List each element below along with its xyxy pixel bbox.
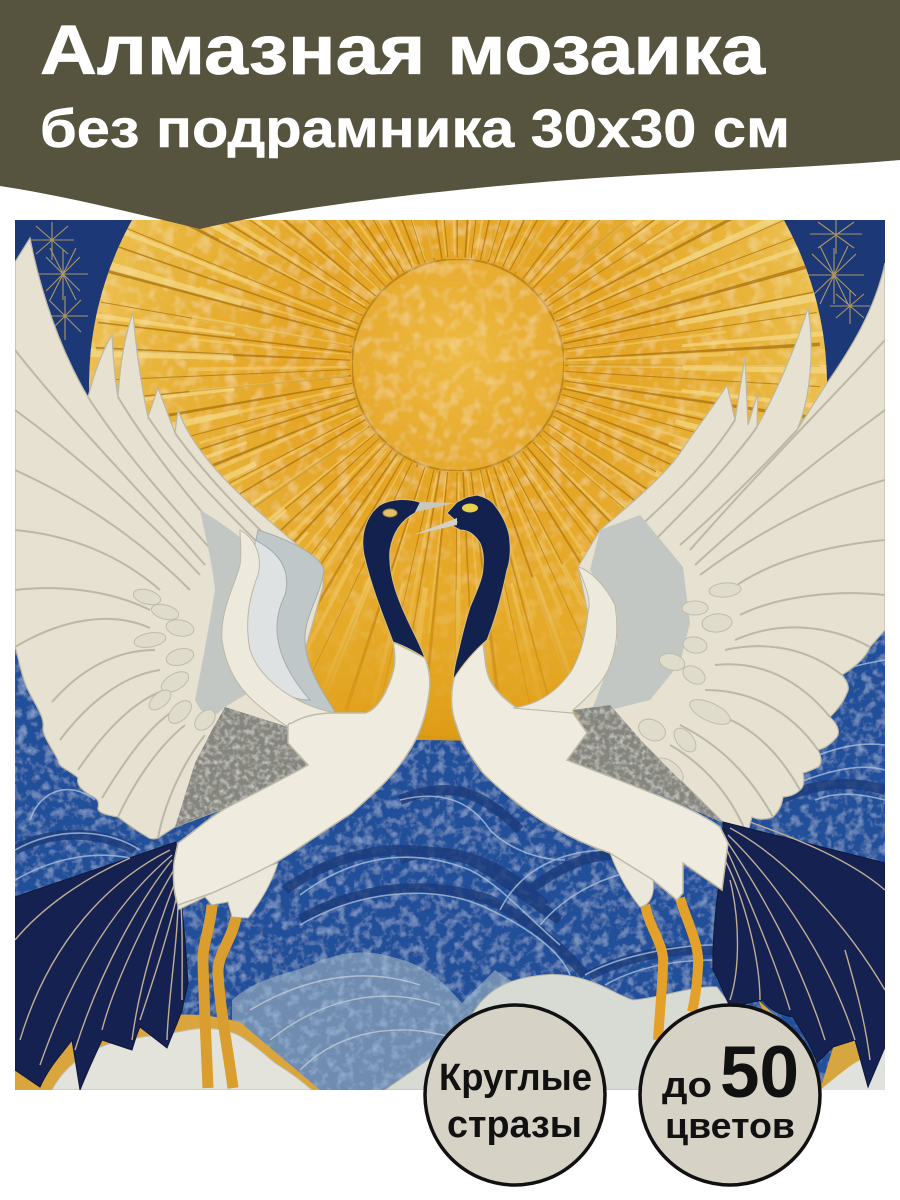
left eye: [383, 509, 397, 517]
grey-blue hills: [232, 952, 540, 1090]
right legs: [645, 898, 698, 1040]
white cloud right: [384, 974, 728, 1090]
left wing: [15, 238, 323, 839]
illustration: two cranes and golden sun: [15, 220, 885, 1090]
left legs: [203, 905, 236, 1088]
badge: up to 50 colours: [640, 1005, 820, 1185]
right grey patch: [567, 705, 723, 823]
wave contour lines: [15, 660, 885, 985]
sun rays stitching: [158, 65, 758, 665]
hill contour lines: [250, 976, 460, 1070]
right inner white wing band: [513, 567, 617, 713]
night sky: [15, 220, 885, 780]
subtitle: без подрамника 30х30 см: [40, 99, 790, 159]
badge: round rhinestones: стразы: [447, 1104, 582, 1146]
right covert feathers: [635, 582, 742, 786]
badge: up to 50 colours: цветов: [665, 1105, 795, 1146]
header banner: [0, 0, 900, 229]
starbursts in sky: [30, 220, 870, 340]
left inner white wing band: [222, 530, 335, 727]
right crane: [413, 263, 885, 1087]
badge: round rhinestones: [425, 1005, 605, 1185]
left pale blue band: [247, 540, 310, 700]
left crane: [15, 238, 455, 1090]
wave contour bands: [15, 784, 885, 975]
right beak: [413, 518, 457, 535]
right wing silver coverts: [590, 515, 690, 715]
lower-right gold and cloud: [758, 1001, 860, 1089]
left covert feathers: [132, 587, 219, 734]
right thigh: [610, 853, 653, 907]
left thigh: [178, 863, 278, 918]
lower-right white cloud: [820, 1045, 885, 1090]
right neck dark: [447, 495, 510, 680]
right tail gold lines: [725, 822, 885, 1060]
left neck dark: [363, 499, 425, 658]
badge: round rhinestones: Круглые: [439, 1057, 592, 1099]
title: Алмазная мозаика: [40, 11, 766, 89]
right wing feather lines: [630, 340, 885, 830]
left beak: [415, 502, 455, 512]
badge: up to 50 colours: 50: [720, 1032, 799, 1113]
sea waves: [15, 620, 885, 1090]
left grey patch: [175, 707, 308, 827]
right eye: [462, 504, 478, 512]
badge: up to 50 colours: до: [662, 1064, 712, 1105]
lower gold shading: [290, 526, 592, 741]
left wing silver coverts: [195, 510, 246, 714]
left body and neck: [173, 642, 430, 905]
left silver bands: [256, 529, 336, 712]
central sun: [352, 259, 564, 471]
white cloud left: [52, 1028, 312, 1090]
lower-left gold band: [15, 1014, 320, 1090]
golden disc: [89, 220, 827, 736]
right tail: [713, 822, 885, 1087]
left wing feather lines: [15, 350, 275, 838]
left tail: [15, 842, 188, 1090]
right wing: [573, 263, 885, 835]
right body and neck: [452, 643, 728, 900]
left tail gold lines: [15, 850, 182, 1065]
